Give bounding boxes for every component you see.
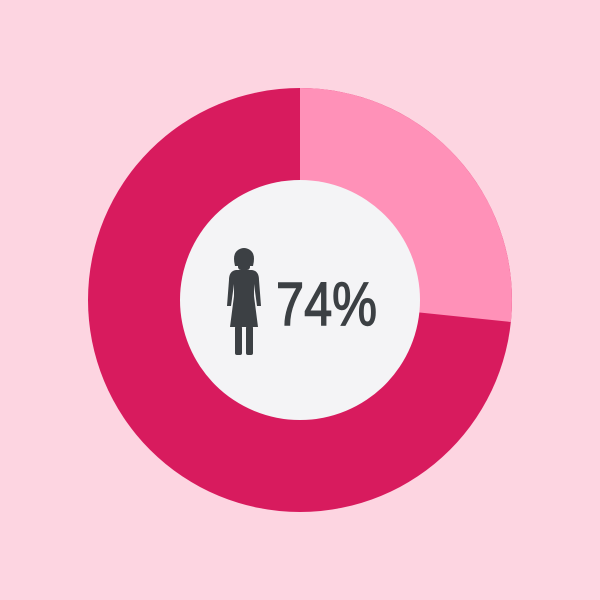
center circle <box>180 180 420 420</box>
segment: 74% <box>88 88 512 512</box>
value label: 74% <box>276 270 377 338</box>
segment: remaining <box>300 88 512 322</box>
icon: woman <box>227 248 261 355</box>
